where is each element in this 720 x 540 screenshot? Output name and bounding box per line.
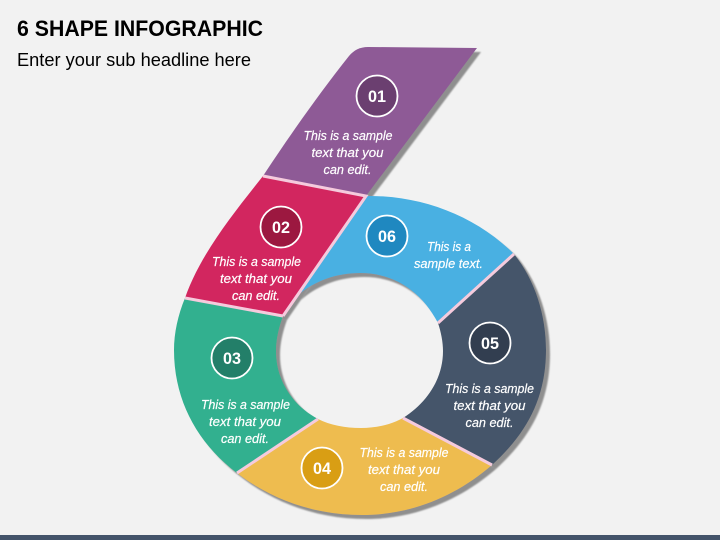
text 01 xyxy=(304,128,392,177)
text 02: This is a sample xyxy=(212,254,301,269)
text 06 xyxy=(414,239,483,271)
badge 01: 01 xyxy=(368,87,386,106)
badge 02: 02 xyxy=(272,218,290,237)
segment 02 shape xyxy=(185,176,366,316)
text 05: can edit. xyxy=(466,415,514,430)
text 06: sample text. xyxy=(414,256,483,271)
subtitle: Enter your sub headline here xyxy=(17,50,251,70)
segment shapes with shadow xyxy=(174,47,546,515)
text 02 xyxy=(212,254,301,303)
segment 04 shape xyxy=(237,418,492,515)
step 06 xyxy=(366,216,483,271)
badge 05: 05 xyxy=(481,334,499,353)
text 02: can edit. xyxy=(232,288,280,303)
text 04 xyxy=(360,445,448,494)
badge 04 xyxy=(302,448,342,488)
text 03: text that you xyxy=(209,414,281,429)
step 05 xyxy=(445,322,534,430)
step 02 xyxy=(212,206,302,303)
badge 06: 06 xyxy=(378,227,396,246)
text 03: This is a sample xyxy=(201,397,290,412)
badge 04: 04 xyxy=(313,459,332,478)
text 04: This is a sample xyxy=(360,445,448,460)
text 01: can edit. xyxy=(324,162,372,177)
text 05: text that you xyxy=(454,398,526,413)
text 05 xyxy=(445,381,534,430)
text 01: This is a sample xyxy=(304,128,392,143)
step 04 xyxy=(302,445,448,494)
segment 01 shape xyxy=(263,47,477,196)
title: 6 SHAPE INFOGRAPHIC xyxy=(17,16,263,41)
step 01 xyxy=(304,76,398,177)
text 06: This is a xyxy=(427,239,471,254)
step 03 xyxy=(201,338,290,446)
text 02: text that you xyxy=(220,271,292,286)
text 04: can edit. xyxy=(380,479,428,494)
six shape diagram xyxy=(174,47,546,515)
text 05: This is a sample xyxy=(445,381,534,396)
text 04: text that you xyxy=(368,462,440,477)
text 03: can edit. xyxy=(221,431,269,446)
text 03 xyxy=(201,397,290,446)
segment 05 shape xyxy=(403,254,546,465)
segment 03 shape xyxy=(174,298,318,473)
text 01: text that you xyxy=(312,145,384,160)
segment 06 shape xyxy=(297,196,514,323)
badge 03: 03 xyxy=(223,349,241,368)
footer bar xyxy=(0,535,720,540)
